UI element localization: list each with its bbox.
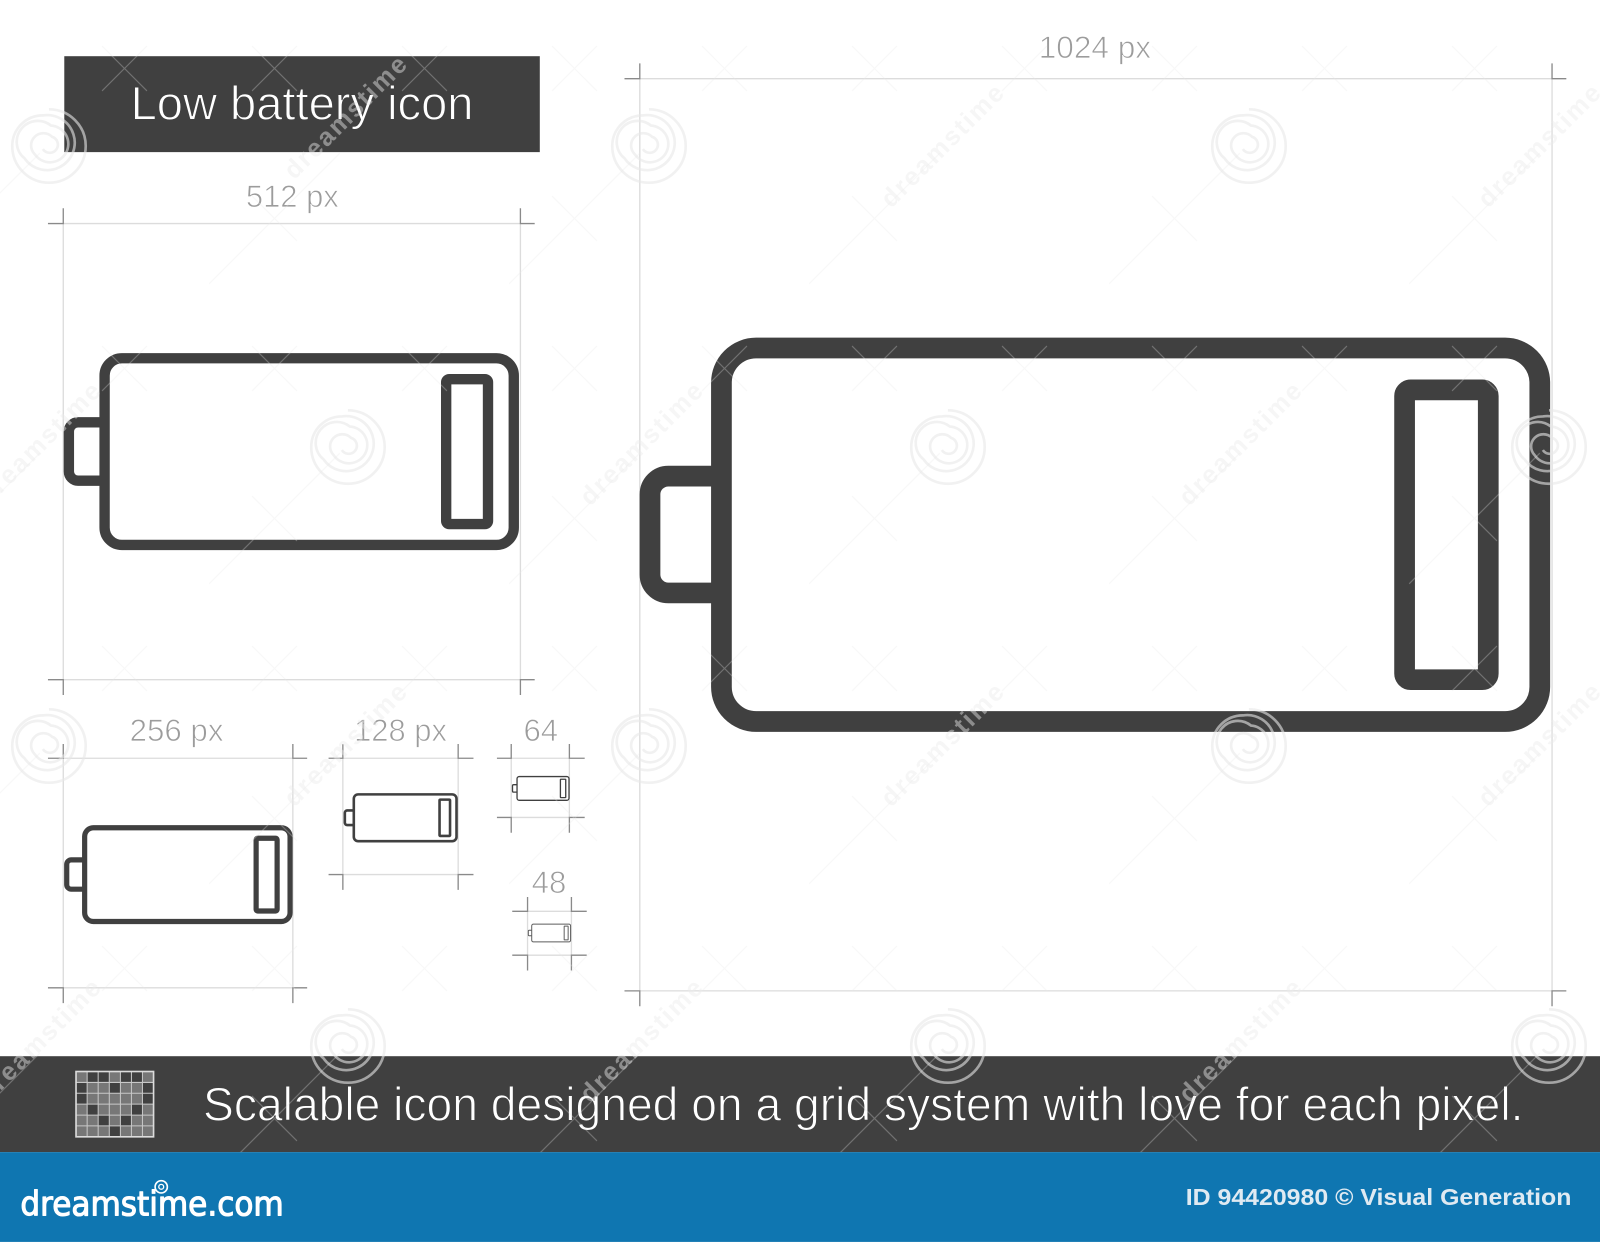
panel: 256 px size preview [48,712,307,1003]
panel: 128 px size preview [329,712,473,890]
panel: 1024 px size preview [624,29,1566,1006]
label: 256 px: 256 px [130,712,224,748]
icon: pixel grid with heart [76,1072,154,1137]
label: 64: 64 [523,712,558,748]
panel: 48 px size preview [512,864,587,970]
icon: battery 128 [345,794,457,841]
watermark overlay: dreamstime [1174,973,1309,1108]
header bar: title: Low battery icon [131,77,473,129]
footer band: grid system tagline [0,1056,1600,1152]
panel: 64 px size preview [497,712,585,833]
watermark overlay: dreamstime [876,677,1011,812]
label: 1024 px: 1024 px [1039,29,1151,65]
footer: dreamstime credit bar [0,1152,1600,1242]
panel: 512 px size preview [48,178,535,695]
watermark overlay: dreamstime [575,973,710,1108]
icon: battery 512 [69,358,514,545]
watermark overlay: dreamstime [1174,376,1309,511]
logo: dreamstime.com: dreamstime.com [20,1184,284,1223]
icon: battery 256 [67,828,290,921]
label: 128 px: 128 px [354,712,447,748]
icon: battery 64 [512,777,569,800]
header bar: title [64,56,540,152]
watermark overlay: dreamstime [575,376,710,511]
watermark overlay: dreamstime [876,78,1011,213]
label: 48: 48 [532,864,566,900]
icon: battery 1024 [650,348,1540,722]
watermark overlay: dreamstime [279,49,414,185]
tagline: Scalable icon designed on a grid system with love for each pixel. [203,1078,1523,1130]
image id and author: ID 94420980 © Visual Generation [1186,1184,1571,1210]
label: 512 px: 512 px [246,178,339,214]
icon: battery 48 [528,924,571,942]
watermark overlay: dreamstime [279,677,414,812]
